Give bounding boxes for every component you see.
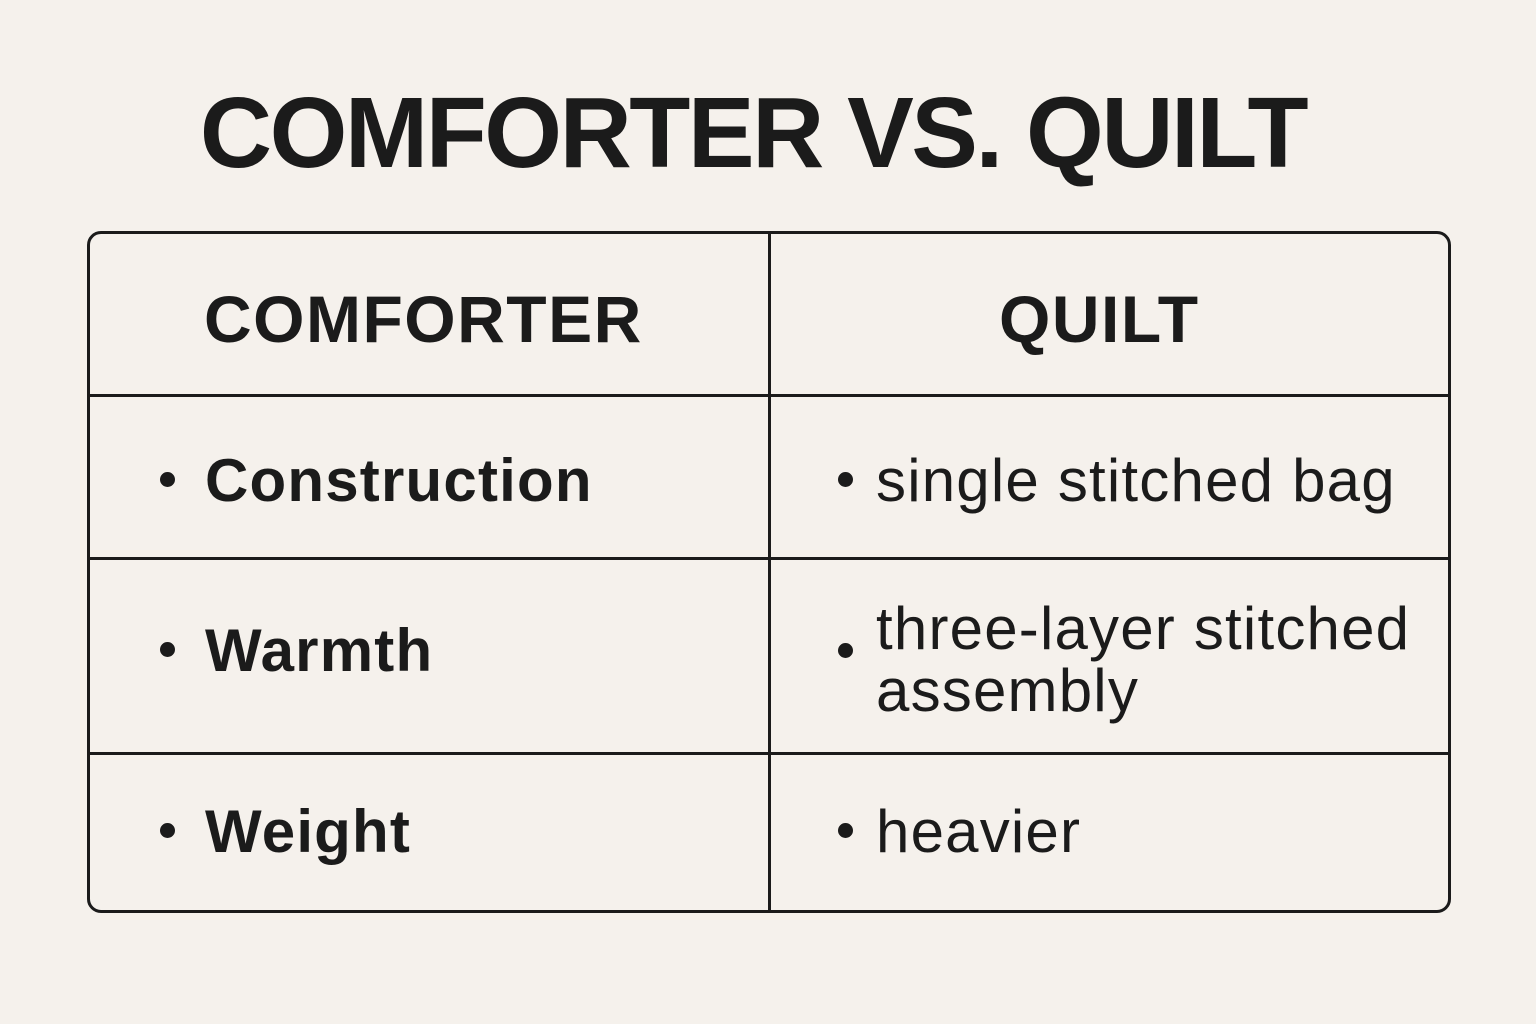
row: warmth <box>160 595 1410 724</box>
row: construction <box>160 447 1396 514</box>
row: construction: single stitched bag <box>876 447 1396 514</box>
row: weight: heavier <box>876 798 1081 865</box>
comparison table <box>87 231 1451 913</box>
row: warmth: Warmth <box>205 617 433 684</box>
header: quilt: QUILT <box>999 282 1200 356</box>
row: weight <box>160 798 1081 865</box>
row: weight: Weight <box>205 798 411 865</box>
row: warmth: assembly <box>876 657 1139 724</box>
title: COMFORTER VS. QUILT <box>200 77 1306 189</box>
row: construction: Construction <box>205 447 593 514</box>
row: warmth: three-layer stitched <box>876 595 1410 662</box>
header: comforter: COMFORTER <box>204 282 643 356</box>
